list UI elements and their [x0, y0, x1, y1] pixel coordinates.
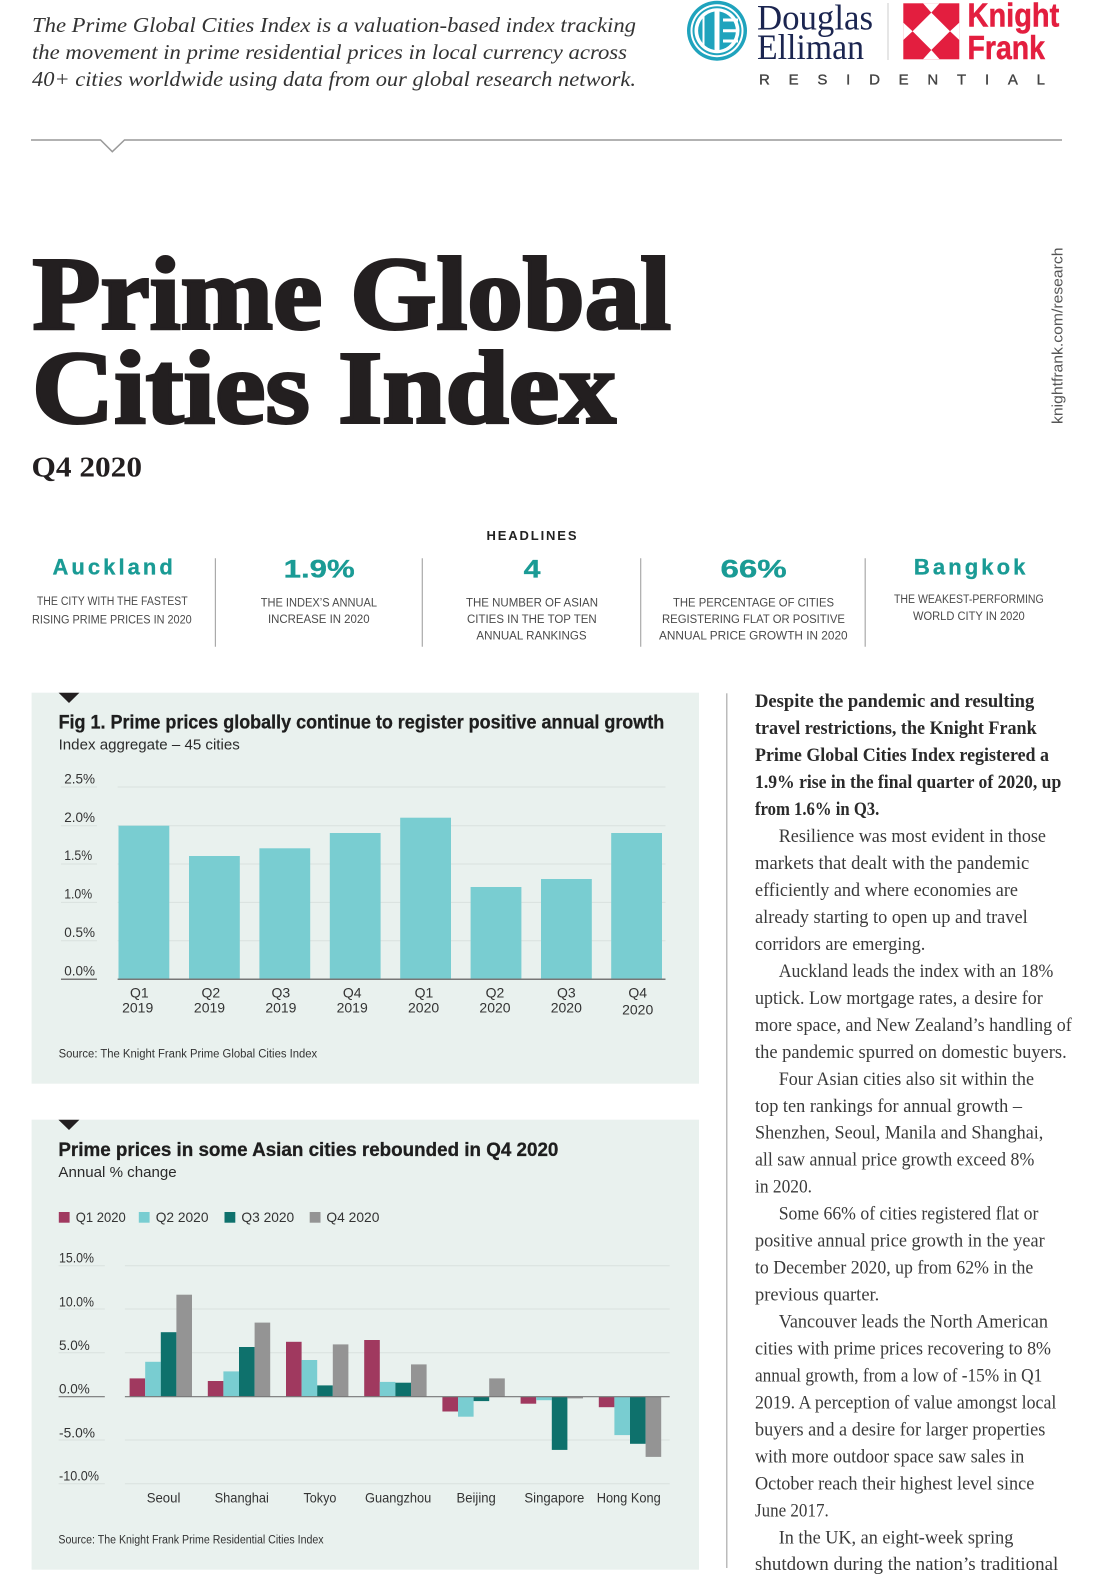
header rule with notch: [31, 140, 1062, 152]
article body paragraphs: [755, 826, 1072, 1575]
article body paragraphs: Resilience was most evident in those: [779, 826, 1046, 847]
stat: 4: [466, 556, 598, 642]
logo: Knight Frank: Frank: [968, 29, 1046, 66]
bar chart: index aggregate: 2020: [622, 1002, 653, 1018]
stat: 1.9%: THE INDEX’S ANNUAL: [261, 597, 378, 609]
stat: 1.9%: INCREASE IN 2020: [268, 614, 370, 626]
bar chart: annual change by city: [59, 1250, 670, 1505]
intro text: the movement in prime residential prices in local currency across: [32, 40, 627, 64]
article body paragraphs: Shenzhen, Seoul, Manila and Shanghai,: [755, 1123, 1043, 1144]
bar chart: index aggregate: Q1: [130, 984, 149, 1000]
headlines heading: HEADLINES: [486, 528, 577, 543]
legend: Q3 2020: [241, 1209, 294, 1225]
article body paragraphs: the pandemic spurred on domestic buyers.: [755, 1042, 1067, 1063]
stat: 66%: [659, 556, 848, 642]
article lead paragraph: Despite the pandemic and resulting: [755, 691, 1035, 712]
article body paragraphs: cities with prime prices recovering to 8%: [755, 1338, 1051, 1360]
bar chart: annual change by city: 15.0%: [59, 1250, 94, 1266]
logo divider: [888, 3, 889, 60]
title: Prime Global: [32, 236, 671, 351]
article body paragraphs: with more outdoor space saw sales in: [755, 1446, 1025, 1467]
source note: Source: The Knight Frank Prime Residential Cities Index: [58, 1534, 324, 1546]
bar chart: annual change by city: Hong Kong: [597, 1489, 661, 1505]
intro text: 40+ cities worldwide using data from our global research network.: [32, 67, 636, 91]
article lead paragraph: Prime Global Cities Index registered a: [755, 745, 1049, 766]
bar chart: index aggregate: Q3: [557, 984, 576, 1000]
logo: Douglas Elliman: Elliman: [757, 27, 864, 67]
panel: Fig 1: [32, 693, 699, 1084]
chart subheading: Annual % change: [58, 1164, 177, 1181]
article body paragraphs: more space, and New Zealand’s handling of: [755, 1015, 1072, 1036]
bar chart: annual change by city: Beijing: [456, 1489, 496, 1505]
bar chart: index aggregate: 2.5%: [64, 770, 95, 786]
stat: 66%: 66%: [720, 556, 787, 584]
article lead paragraph: 1.9% rise in the final quarter of 2020, up: [755, 772, 1061, 793]
article body paragraphs: October reach their highest level since: [755, 1473, 1034, 1494]
article body paragraphs: 2019. A perception of value amongst local: [755, 1392, 1056, 1413]
article lead paragraph: from 1.6% in Q3.: [755, 799, 879, 820]
article body paragraphs: all saw annual price growth exceed 8%: [755, 1150, 1034, 1171]
article body paragraphs: positive annual price growth in the year: [755, 1231, 1045, 1252]
article lead paragraph: travel restrictions, the Knight Frank: [755, 718, 1037, 739]
article body paragraphs: markets that dealt with the pandemic: [755, 853, 1029, 874]
bar chart: annual change by city: Shanghai: [215, 1489, 269, 1505]
intro text: The Prime Global Cities Index is a valuation-based index tracking: [32, 13, 636, 37]
intro text: [32, 13, 636, 91]
stat: Bangkok: WORLD CITY IN 2020: [913, 611, 1025, 623]
article body paragraphs: efficiently and where economies are: [755, 880, 1018, 901]
bar chart: index aggregate: 1.5%: [64, 847, 92, 863]
article body paragraphs: Vancouver leads the North American: [779, 1312, 1048, 1332]
source note: Source: The Knight Frank Prime Global Cities Index: [59, 1048, 317, 1060]
bar chart: index aggregate: 2019: [337, 1000, 368, 1016]
bar chart: index aggregate: [61, 770, 666, 1018]
article body paragraphs: previous quarter.: [755, 1284, 879, 1306]
article body paragraphs: in 2020.: [755, 1177, 812, 1198]
logo: Knight Frank: [903, 0, 1059, 66]
bar chart: annual change by city: -10.0%: [59, 1468, 99, 1484]
article text: [755, 691, 1072, 1575]
article body paragraphs: Four Asian cities also sit within the: [779, 1069, 1034, 1090]
article body paragraphs: June 2017.: [755, 1500, 829, 1521]
stat: 4: 4: [524, 556, 541, 584]
stat: Auckland: Auckland: [52, 554, 173, 579]
article body paragraphs: already starting to open up and travel: [755, 907, 1028, 928]
bar chart: index aggregate: 2019: [122, 1000, 153, 1016]
bar chart: annual change by city: Tokyo: [304, 1489, 337, 1505]
bar chart: index aggregate: Q1: [415, 984, 434, 1000]
title: Cities Index: [32, 331, 616, 446]
panel marker: [59, 693, 79, 703]
stat: Auckland: RISING PRIME PRICES IN 2020: [32, 615, 192, 627]
bar chart: index aggregate: 2019: [265, 1000, 297, 1016]
bar chart: index aggregate: 2019: [194, 1000, 225, 1016]
article body paragraphs: shutdown during the nation’s traditional: [755, 1554, 1058, 1575]
stat: Bangkok: THE WEAKEST-PERFORMING: [894, 594, 1044, 606]
stat: Auckland: THE CITY WITH THE FASTEST: [37, 596, 188, 608]
chart subheading: Index aggregate – 45 cities: [59, 736, 240, 753]
panel: Fig 2: [32, 1120, 699, 1570]
bar chart: index aggregate: 2020: [551, 1000, 582, 1016]
subtitle: Q4 2020: Q4 2020: [32, 453, 142, 484]
bar chart: index aggregate: 1.0%: [64, 886, 92, 902]
bar chart: annual change by city: 5.0%: [59, 1337, 90, 1353]
stat: 66%: ANNUAL PRICE GROWTH IN 2020: [659, 630, 848, 642]
article body paragraphs: Auckland leads the index with an 18%: [779, 961, 1054, 982]
panel marker: [58, 1120, 79, 1130]
article body paragraphs: Some 66% of cities registered flat or: [779, 1204, 1039, 1225]
vertical url: knightfrank.com/research: [1050, 248, 1066, 424]
legend: Q4 2020: [326, 1209, 380, 1225]
bar chart: annual change by city: 0.0%: [59, 1380, 90, 1396]
bar chart: index aggregate: 2020: [408, 1000, 439, 1016]
stat: 66%: THE PERCENTAGE OF CITIES: [673, 597, 834, 609]
stat: Auckland: [32, 554, 192, 627]
article body paragraphs: buyers and a desire for larger properties: [755, 1419, 1045, 1440]
stat: 66%: REGISTERING FLAT OR POSITIVE: [662, 614, 845, 626]
bar chart: index aggregate: 2020: [479, 1000, 511, 1016]
bar chart: annual change by city: Seoul: [147, 1489, 180, 1505]
bar chart: annual change by city: Guangzhou: [365, 1489, 431, 1505]
title: [32, 236, 671, 446]
bar chart: annual change by city: 10.0%: [59, 1293, 94, 1309]
headlines dividers: [215, 558, 865, 647]
bar chart: index aggregate: Q2: [486, 984, 505, 1000]
article body paragraphs: corridors are emerging.: [755, 934, 925, 955]
article body paragraphs: annual growth, from a low of -15% in Q1: [755, 1366, 1042, 1386]
article lead paragraph: [755, 691, 1061, 820]
legend: Q1 2020: [76, 1209, 126, 1225]
legend: Q2 2020: [156, 1209, 209, 1225]
column rule: [726, 693, 728, 1568]
legend: [59, 1209, 380, 1225]
bar chart: index aggregate: Q4: [628, 984, 647, 1000]
bar chart: index aggregate: 0.5%: [64, 924, 95, 940]
stat: 4: THE NUMBER OF ASIAN: [466, 597, 598, 609]
bar chart: index aggregate: 2.0%: [64, 809, 95, 825]
bar chart: index aggregate: Q2: [201, 984, 220, 1000]
stat: 4: CITIES IN THE TOP TEN: [467, 614, 597, 626]
article body paragraphs: In the UK, an eight-week spring: [779, 1527, 1014, 1548]
bar chart: annual change by city: Singapore: [524, 1489, 584, 1505]
chart heading: Prime prices in some Asian cities rebounded in Q4 2020: [58, 1140, 558, 1161]
stat: 1.9%: [261, 556, 378, 626]
article body paragraphs: top ten rankings for annual growth –: [755, 1096, 1022, 1117]
logo: Douglas Elliman: [687, 0, 873, 67]
stat: Bangkok: [894, 554, 1044, 623]
stat: 1.9%: 1.9%: [284, 556, 355, 584]
logo: residential: RESIDENTIAL: [759, 72, 1045, 89]
stat: Bangkok: Bangkok: [914, 554, 1026, 579]
article body paragraphs: uptick. Low mortgage rates, a desire for: [755, 988, 1043, 1009]
stat: 4: ANNUAL RANKINGS: [476, 630, 587, 642]
bar chart: index aggregate: 0.0%: [64, 962, 95, 978]
bar chart: annual change by city: -5.0%: [59, 1424, 95, 1440]
article body paragraphs: to December 2020, up from 62% in the: [755, 1258, 1033, 1279]
bar chart: index aggregate: Q4: [343, 984, 362, 1000]
bar chart: index aggregate: Q3: [272, 984, 290, 1000]
chart heading: Fig 1. Prime prices globally continue to register positive annual growth: [59, 712, 664, 733]
